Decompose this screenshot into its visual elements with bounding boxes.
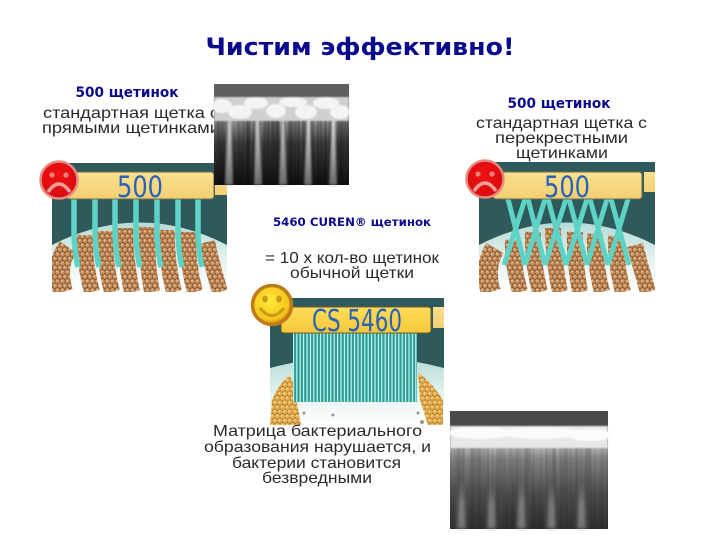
granule streaks — [488, 228, 648, 292]
text block: biofilm matrix disrupted: образования нарушается, и — [204, 439, 431, 456]
icon: sad face — [466, 160, 504, 198]
icon: sad face — [40, 162, 78, 198]
text block: biofilm matrix disrupted: Матрица бактериального — [213, 423, 422, 440]
loose particles — [302, 412, 424, 424]
text block: straight bristles: прямыми щетинками — [42, 120, 220, 137]
text block: CUREN bristles — [265, 215, 440, 282]
illustration: straight bristles brush — [40, 162, 227, 292]
dense bristles — [293, 333, 417, 402]
granule streaks — [60, 227, 220, 292]
text block: CUREN bristles: 5460 CUREN® щетинок — [273, 215, 431, 229]
bar number: 500 — [544, 170, 590, 204]
text block: biofilm matrix disrupted: безвредными — [262, 470, 372, 487]
photo: microscope view of standard bristles — [212, 84, 350, 185]
text block: crossed bristles: щетинками — [516, 145, 608, 162]
bar number: CS 5460 — [312, 304, 402, 339]
photo: microscope view of CUREN bristles — [448, 411, 612, 529]
bristles — [74, 199, 202, 267]
handle bar — [281, 307, 431, 333]
text block: CUREN bristles: обычной щетки — [290, 265, 414, 282]
text block: crossed bristles: перекрестными — [495, 130, 628, 147]
handle bar — [66, 172, 214, 199]
text block: biofilm matrix disrupted: бактерии становится — [232, 455, 401, 472]
text block: straight bristles: стандартная щетка с — [43, 105, 219, 122]
text block: crossed bristles: 500 щетинок — [508, 96, 611, 112]
icon: smiley face — [252, 286, 292, 324]
text block: crossed bristles — [476, 96, 647, 162]
text block: CUREN bristles: = 10 х кол-во щетинок — [265, 250, 440, 267]
text block: straight bristles — [42, 85, 220, 137]
illustration: crossed bristles brush — [466, 160, 655, 292]
bar number: 500 — [117, 170, 163, 204]
crossed bristles — [504, 199, 629, 265]
text block: crossed bristles: стандартная щетка с — [476, 115, 647, 132]
handle bar — [493, 172, 642, 199]
text block: straight bristles: 500 щетинок — [76, 85, 179, 101]
illustration: CS 5460 brush — [252, 286, 444, 426]
granule side piles — [270, 376, 301, 425]
text block: biofilm matrix disrupted — [204, 423, 431, 487]
title: Чистим эффективно! — [206, 33, 514, 61]
